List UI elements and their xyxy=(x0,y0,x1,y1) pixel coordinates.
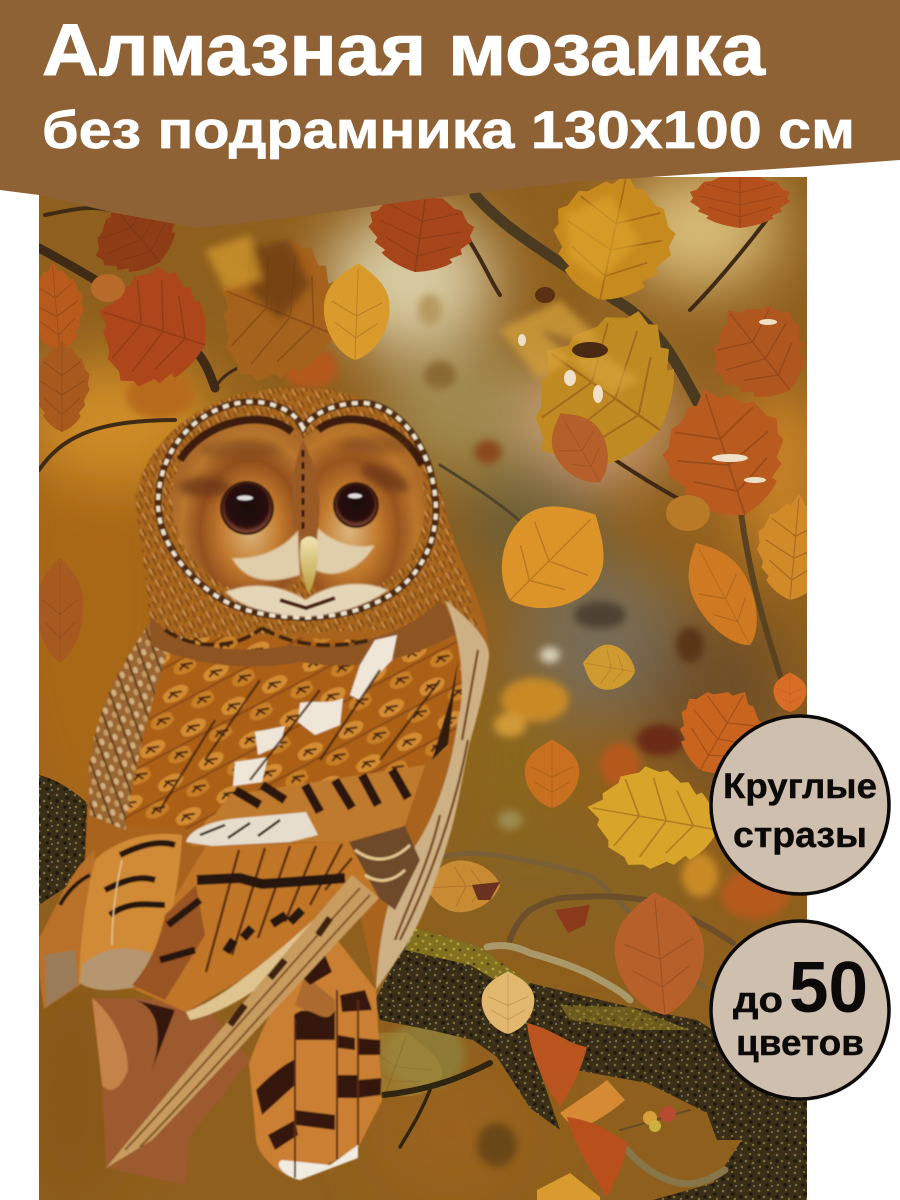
eye left xyxy=(220,481,274,535)
blurred autumn background xyxy=(0,170,830,1200)
pale left mantle xyxy=(89,624,190,830)
yellow leaf behind branch xyxy=(707,1050,763,1117)
white scalloped band xyxy=(186,812,318,846)
facial disc xyxy=(172,418,303,598)
right cream flank xyxy=(376,600,489,990)
title line 2: без подрамника 130х100 см xyxy=(42,101,855,160)
badge: round rhinestones xyxy=(711,716,889,894)
eye right xyxy=(333,482,379,528)
badge: round rhinestones: стразы xyxy=(733,814,867,855)
primary band xyxy=(106,875,379,1168)
dark feather below wing tip xyxy=(132,885,205,1000)
head plumage xyxy=(135,388,478,640)
left perch stump xyxy=(39,775,88,905)
dark back edge xyxy=(432,660,458,760)
title line 1: Алмазная мозаика xyxy=(42,10,767,91)
neck ruff xyxy=(150,600,460,667)
scapular feather row xyxy=(190,765,425,846)
badge: up to 50 colours xyxy=(711,921,889,1099)
dark brow arcs xyxy=(180,420,292,460)
small buds and berries xyxy=(91,274,710,1132)
beak xyxy=(300,536,318,594)
body mass xyxy=(84,520,490,990)
mottled back xyxy=(125,636,465,830)
badge: up to 50 colours: до xyxy=(733,979,783,1020)
secondary feathers xyxy=(136,842,379,1012)
owl xyxy=(39,388,489,1185)
header banner xyxy=(0,0,900,228)
thin twigs xyxy=(383,854,733,1184)
facial rim xyxy=(158,402,436,618)
centre forehead stripe xyxy=(293,440,320,540)
owl head xyxy=(158,402,436,618)
tail feathers xyxy=(249,942,382,1180)
white feather patches xyxy=(233,635,397,786)
lower dark feathers xyxy=(92,998,250,1185)
scalloped feathers right xyxy=(349,826,420,910)
autumn leaves xyxy=(25,161,837,1200)
mossy main branch xyxy=(375,927,807,1200)
badge: up to 50 colours: 50 xyxy=(789,948,868,1028)
badge: up to 50 colours: цветов xyxy=(736,1022,864,1063)
branches xyxy=(39,195,785,690)
dark shaft marks xyxy=(160,670,440,810)
badge: round rhinestones: Круглые xyxy=(723,767,877,806)
pale cheeks xyxy=(225,528,388,617)
eye shadow smudges xyxy=(179,436,413,498)
wing tip feathers xyxy=(39,850,95,1009)
lower background leaf behind branch xyxy=(378,1032,442,1096)
